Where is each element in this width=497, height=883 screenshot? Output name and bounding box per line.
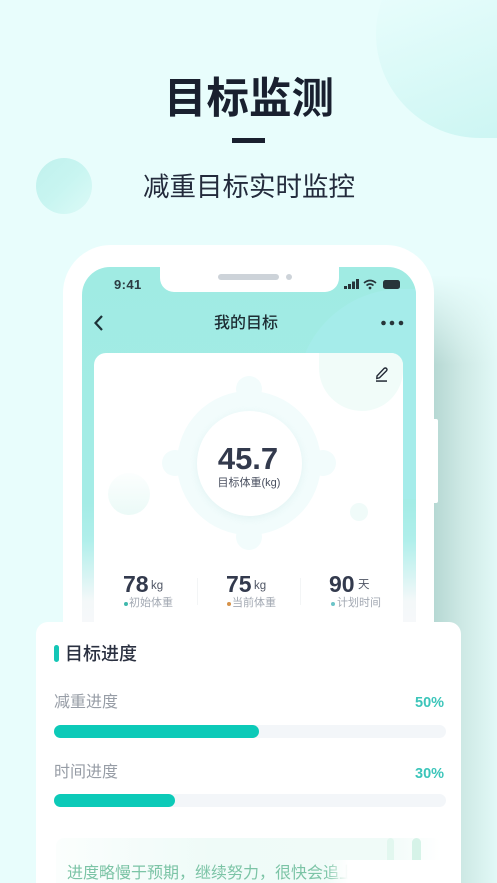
stat: current weight: kg xyxy=(254,580,266,592)
status icons xyxy=(344,279,400,290)
status time: 9:41 xyxy=(114,277,142,292)
stat: plan time: 90 xyxy=(329,571,355,597)
advice decoration xyxy=(387,838,394,883)
notch xyxy=(160,263,339,292)
stat: initial weight: 78 xyxy=(123,571,149,597)
advice text: 进度略慢于预期，继续努力，很快会追上 xyxy=(67,865,355,882)
card bubble left xyxy=(108,473,150,515)
time progress fill xyxy=(54,794,175,806)
title: 目标监测 xyxy=(164,76,334,123)
weight progress fill xyxy=(54,725,259,738)
weight progress value: 50% xyxy=(415,695,444,711)
stat: current weight: 75 xyxy=(226,571,252,597)
side button xyxy=(433,419,438,503)
progress card xyxy=(36,622,461,883)
more menu xyxy=(381,320,404,326)
title divider xyxy=(232,138,265,143)
advice fade xyxy=(326,860,441,883)
screen title: 我的目标 xyxy=(214,315,278,332)
stat: current weight: 当前体重 xyxy=(232,597,276,609)
time progress label: 时间进度 xyxy=(54,764,118,781)
stat divider xyxy=(197,578,198,605)
stat: initial weight: kg xyxy=(151,580,163,592)
weight progress label: 减重进度 xyxy=(54,694,118,711)
stat: current weight xyxy=(226,571,276,609)
subtitle: 减重目标实时监控 xyxy=(143,172,355,202)
advice decoration xyxy=(412,838,421,883)
back arrow xyxy=(94,315,103,331)
time progress bar xyxy=(54,794,446,807)
stat: plan time: 计划时间 xyxy=(337,597,381,609)
stat: initial weight xyxy=(123,571,173,609)
target label: 目标体重(kg) xyxy=(218,477,280,489)
phone mockup xyxy=(63,245,434,883)
camera xyxy=(286,274,292,280)
edit icon xyxy=(376,367,388,382)
dial centre xyxy=(197,411,302,516)
phone screen xyxy=(82,267,416,647)
dial ring xyxy=(162,376,336,550)
section heading: 目标进度 xyxy=(65,644,137,664)
speaker xyxy=(218,274,279,280)
stat: plan time xyxy=(329,571,381,609)
decorative circle left xyxy=(36,158,92,214)
header highlight xyxy=(297,289,416,499)
phone shadow xyxy=(400,275,497,883)
goal card xyxy=(94,353,403,647)
decorative circle top right xyxy=(376,0,497,138)
target dial xyxy=(162,376,336,550)
weight progress bar xyxy=(54,725,446,738)
stat: initial weight: 初始体重 xyxy=(129,597,173,609)
card bubble top right xyxy=(319,353,403,411)
stat divider xyxy=(300,578,301,605)
section marker xyxy=(54,645,59,662)
time progress value: 30% xyxy=(415,766,444,782)
advice box xyxy=(56,838,441,883)
target value: 45.7 xyxy=(218,441,278,476)
stat: plan time: 天 xyxy=(358,579,370,591)
card bubble right xyxy=(350,503,368,521)
